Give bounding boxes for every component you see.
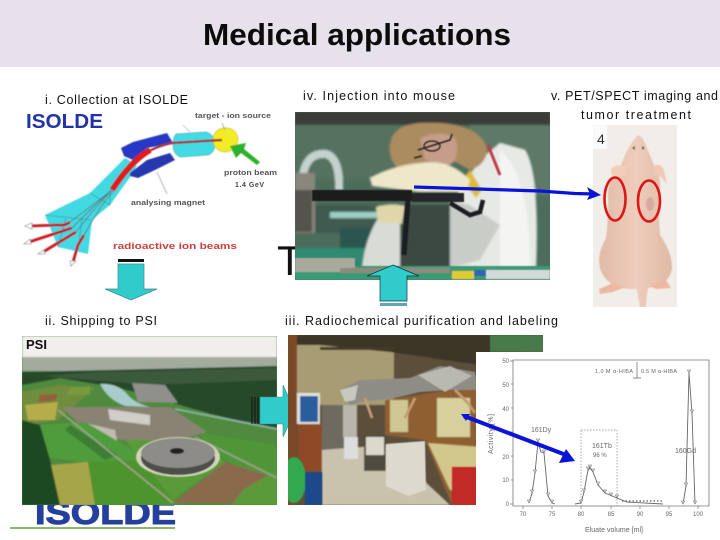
arrow: up from purification [367, 265, 419, 306]
label: 1.4 GeV: 1.4 GeV [235, 182, 264, 189]
photo background [593, 125, 677, 307]
y axis tick labels: 40 [502, 407, 510, 413]
y axis tick labels: 10 [502, 478, 510, 484]
x axis tick labels: 75 [549, 512, 556, 518]
tumor marker right [638, 180, 660, 222]
x axis tick labels: 100 [693, 512, 704, 518]
title band [0, 0, 720, 67]
peak label: Dy: 161Dy [531, 427, 552, 434]
label: target - ion source: target - ion source [195, 111, 271, 120]
diagram heading: ISOLDE: ISOLDE [26, 111, 103, 133]
y axis tick labels: 50 [502, 383, 510, 389]
y axis title: Activity [%] [488, 414, 495, 454]
panel: radiochemistry lab photo [282, 335, 543, 505]
heading: step iv: iv. Injection into mouse [303, 89, 455, 103]
heading: step i: i. Collection at ISOLDE [45, 93, 188, 107]
arrow: down to PSI [105, 259, 157, 300]
injection apparatus [295, 134, 550, 280]
x axis tick labels: 95 [666, 512, 673, 518]
heading: step ii: ii. Shipping to PSI [45, 314, 157, 328]
y axis tick labels: 50 [502, 359, 510, 365]
PSI label: PSI [26, 337, 47, 352]
panel: mouse photo [593, 125, 677, 307]
label: proton beam: proton beam [224, 168, 277, 177]
stray letter T: T [277, 237, 303, 284]
title: Medical applications [203, 17, 511, 52]
panel: ISOLDE beamline diagram [24, 93, 277, 266]
y axis tick labels: 0 [506, 502, 510, 508]
peak label: 96 %: 96 % [593, 453, 607, 459]
arrow: injection to imaging [414, 187, 601, 200]
panel: PSI aerial photo [22, 336, 277, 505]
elution curve [529, 373, 695, 504]
arrow: purification to Tb fraction [461, 414, 575, 463]
x axis title: Eluate volume [ml] [585, 527, 643, 534]
tail markers [622, 500, 662, 502]
peak label: Tb: 161Tb [592, 443, 612, 450]
chart plot [488, 359, 709, 534]
panel: injection photo [295, 112, 550, 280]
x axis tick labels: 70 [520, 512, 527, 518]
heading: step v: v. PET/SPECT imaging and [551, 89, 718, 103]
label: analysing magnet: analysing magnet [131, 198, 206, 207]
mouse body [593, 125, 672, 307]
x axis tick labels: 85 [608, 512, 615, 518]
heading: step v second line: tumor treatment [581, 108, 692, 122]
x axis tick labels: 80 [578, 512, 585, 518]
y axis tick labels: 20 [502, 455, 510, 461]
logo underline [10, 527, 175, 529]
peak label: Gd: 160Gd [675, 448, 696, 455]
eluent label right: 0.5 M α-HIBA [641, 369, 677, 375]
eluent label left: 1.0 M α-HIBA [595, 369, 633, 375]
tumor marker left [604, 178, 626, 220]
arrow: right to purification lab [252, 385, 295, 437]
diagram: beamline [24, 123, 260, 266]
x axis tick labels [520, 512, 704, 518]
lab equipment [282, 335, 543, 505]
building: ring cyclotron [136, 437, 220, 477]
label: radioactive ion beams: radioactive ion beams [113, 241, 237, 252]
heading: step iii: iii. Radiochemical purification and labeling [285, 314, 558, 328]
logo wordmark: ISOLDE [35, 495, 176, 531]
chart: elution profile [476, 352, 720, 540]
x axis tick labels: 90 [637, 512, 644, 518]
selected fraction box [581, 430, 617, 506]
y axis tick labels [502, 359, 510, 508]
sample number: 4 [597, 131, 605, 147]
chart background [476, 352, 720, 540]
